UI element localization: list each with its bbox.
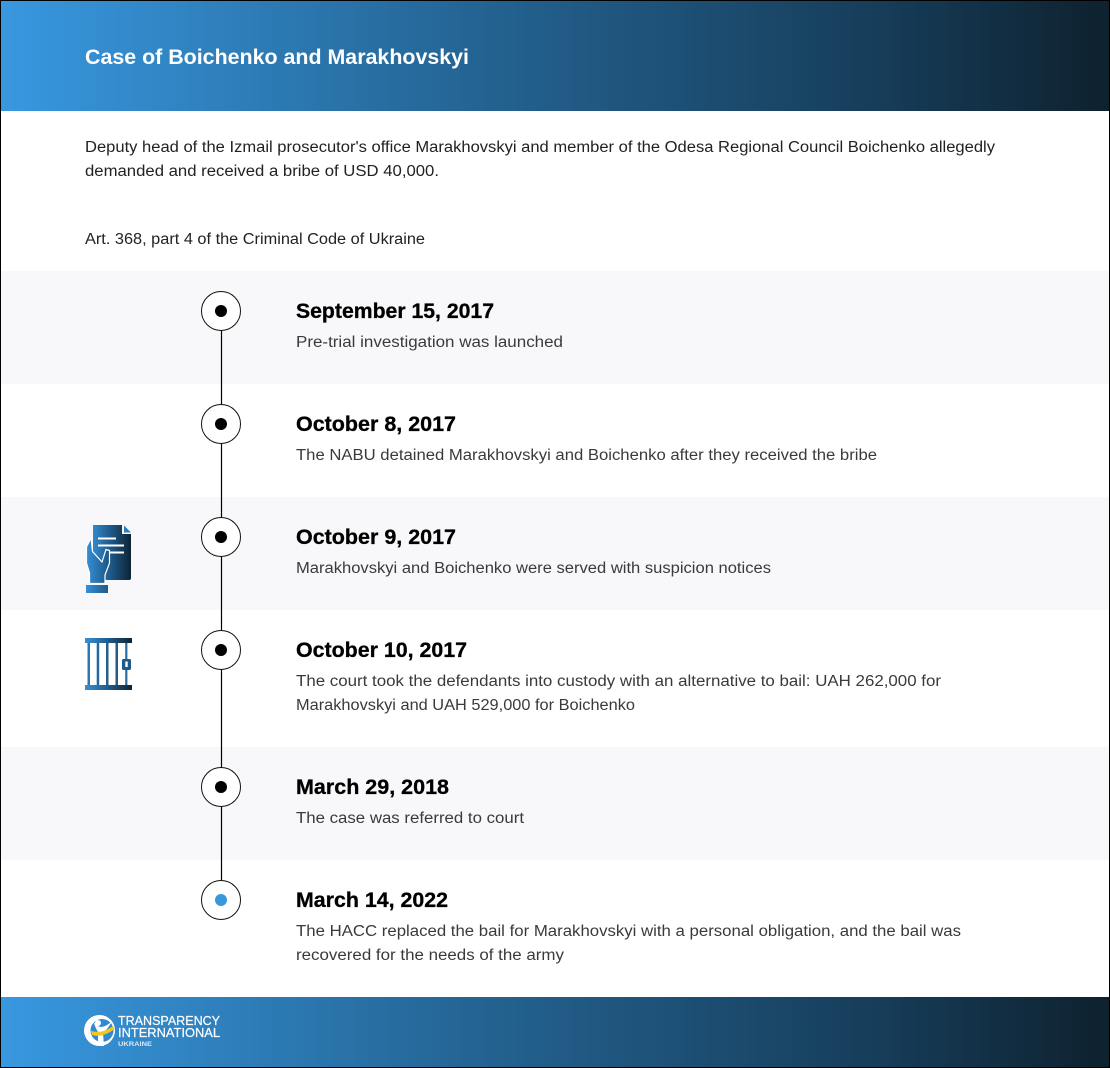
timeline marker: September 15, 2017 <box>202 292 240 330</box>
event: March 14, 2022: recovered for the needs of the army <box>296 947 564 964</box>
event: March 14, 2022 <box>296 889 961 964</box>
header band <box>0 0 1110 111</box>
event: October 10, 2017: The court took the defendants into custody with an alternative to bail: UAH 262,000 for <box>296 673 941 690</box>
footer band <box>0 997 1110 1068</box>
icon: hand holding document <box>86 525 131 593</box>
event: October 8, 2017: October 8, 2017 <box>296 413 456 436</box>
title: Case of Boichenko and Marakhovskyi <box>85 46 469 69</box>
logo: Transparency International Ukraine: UKRAINE <box>118 1042 152 1048</box>
event: March 29, 2018: The case was referred to court <box>296 810 525 827</box>
timeline marker: March 14, 2022 <box>202 880 240 920</box>
intro text: demanded and received a bribe of USD 40,000. <box>85 163 439 180</box>
logo: Transparency International Ukraine: TRANSPARENCY <box>118 1014 221 1028</box>
event: March 14, 2022: The HACC replaced the bail for Marakhovskyi with a personal obligation, and the bail was <box>296 923 961 940</box>
timeline marker: October 10, 2017 <box>202 630 240 670</box>
event: October 8, 2017: The NABU detained Marakhovskyi and Boichenko after they received the bribe <box>296 447 877 464</box>
event: March 29, 2018 <box>296 776 525 827</box>
logo: Transparency International Ukraine: INTERNATIONAL <box>118 1026 220 1040</box>
intro text <box>85 139 995 180</box>
event: September 15, 2017: September 15, 2017 <box>296 300 494 323</box>
intro text: Deputy head of the Izmail prosecutor's office Marakhovskyi and member of the Odesa Regional Council Boichenko allegedly <box>85 139 995 156</box>
timeline marker: March 29, 2018 <box>202 768 240 806</box>
event: October 9, 2017: October 9, 2017 <box>296 526 456 549</box>
event: March 14, 2022: March 14, 2022 <box>296 889 448 912</box>
legal article reference: Art. 368, part 4 of the Criminal Code of Ukraine <box>85 231 425 248</box>
event: October 9, 2017: Marakhovskyi and Boichenko were served with suspicion notices <box>296 560 771 577</box>
icon: prison bars <box>85 638 132 690</box>
event: March 29, 2018: March 29, 2018 <box>296 776 449 799</box>
timeline line <box>220 311 222 900</box>
logo: Transparency International Ukraine <box>84 1014 221 1048</box>
event: October 8, 2017 <box>296 413 877 464</box>
event: October 10, 2017 <box>296 639 941 714</box>
event: October 10, 2017: October 10, 2017 <box>296 639 467 662</box>
timeline marker: October 9, 2017 <box>202 518 240 556</box>
event: September 15, 2017 <box>296 300 563 351</box>
row background bands <box>0 271 1110 860</box>
event: October 10, 2017: Marakhovskyi and UAH 529,000 for Boichenko <box>296 697 635 714</box>
event: September 15, 2017: Pre-trial investigation was launched <box>296 334 563 351</box>
timeline marker: October 8, 2017 <box>202 404 240 444</box>
event: October 9, 2017 <box>296 526 771 577</box>
